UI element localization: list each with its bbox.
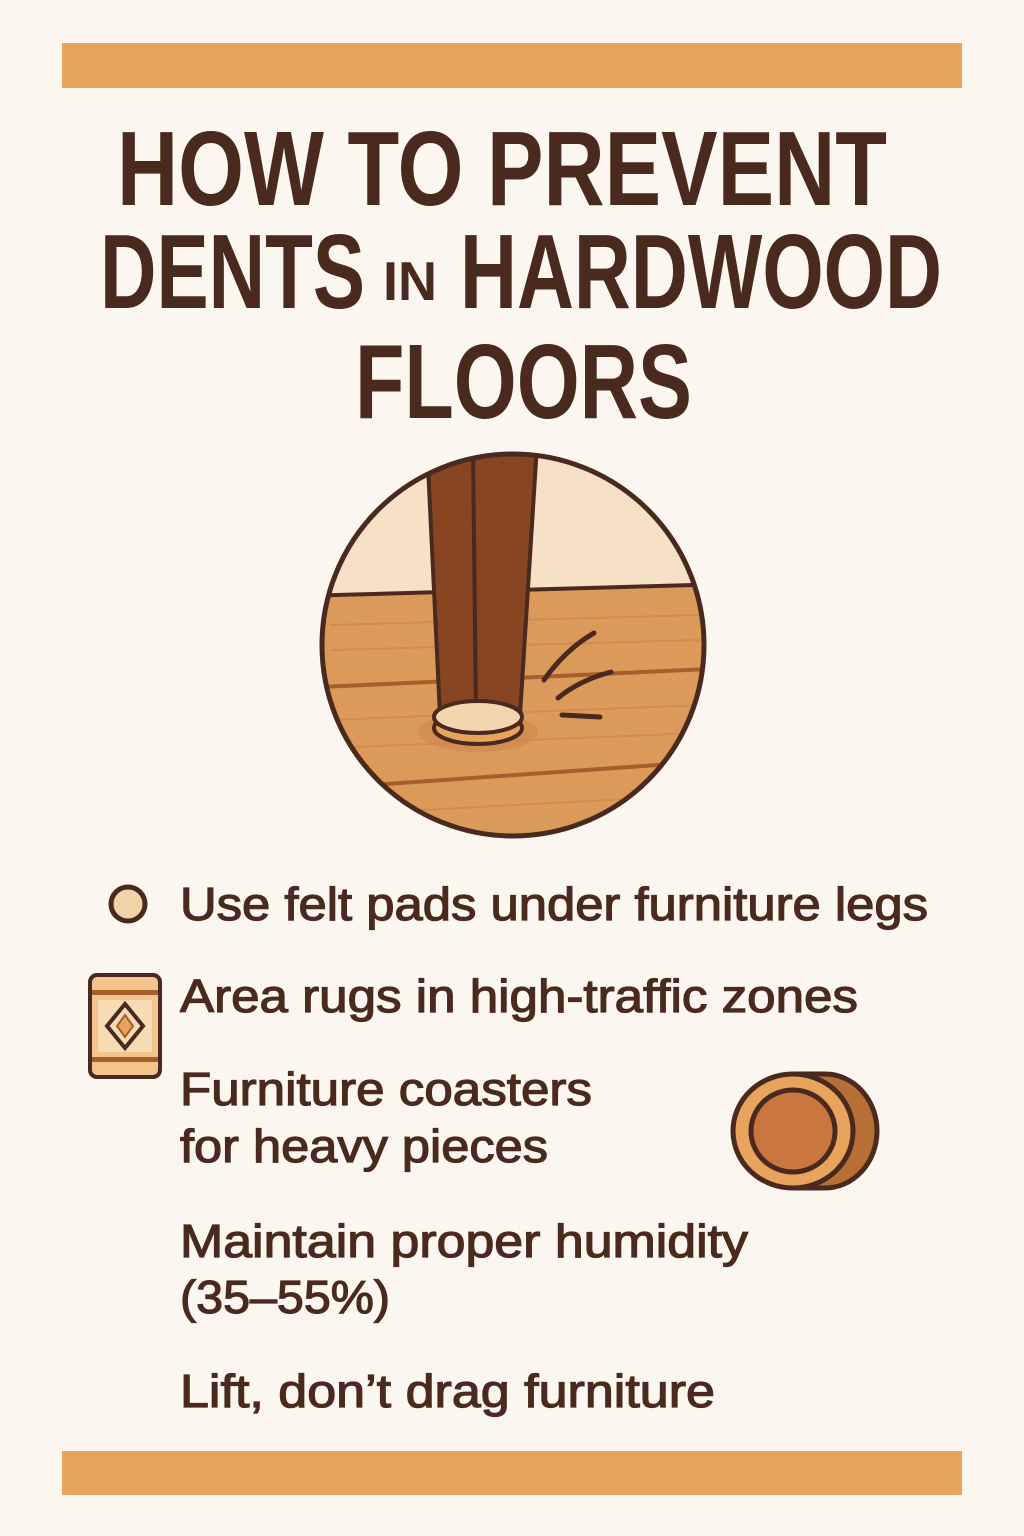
illustration: chair leg on floor: [320, 452, 706, 838]
tips list: Furniture coasters: [180, 1063, 592, 1115]
tips list: Use felt pads under furniture legs: [180, 878, 928, 930]
tips list: for heavy pieces: [180, 1120, 548, 1172]
title: DENTS: [100, 213, 365, 331]
bottom bar: [62, 1451, 962, 1495]
felt pad: [434, 712, 522, 744]
title: FLOORS: [355, 323, 692, 441]
tips list: [180, 878, 928, 1417]
icon: rug: [90, 975, 160, 1077]
tips list: (35–55%): [180, 1271, 390, 1323]
tips list: Lift, don’t drag furniture: [180, 1365, 715, 1417]
title: IN: [383, 250, 437, 312]
icon: felt pad dot: [111, 887, 145, 921]
motion lines: [544, 633, 611, 717]
icon: coaster: [733, 1074, 877, 1188]
top bar: [62, 43, 962, 88]
tips list: Area rugs in high-traffic zones: [180, 970, 858, 1022]
title: [100, 110, 942, 441]
tips list: Maintain proper humidity: [180, 1215, 748, 1267]
